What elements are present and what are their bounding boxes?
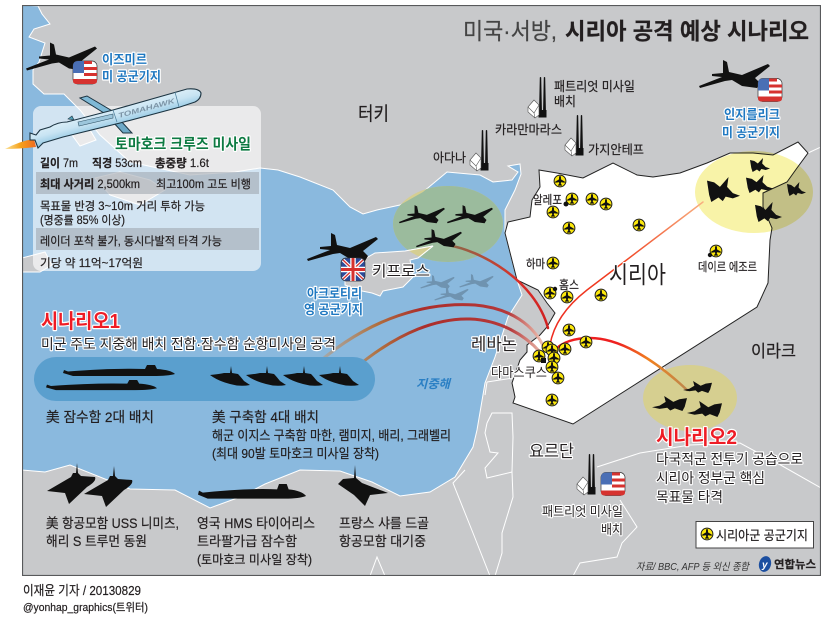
submarines: [46, 365, 175, 390]
icon: tomahawk missile: [5, 89, 201, 149]
carrier captions: 영국 HMS 타이어리스: [197, 516, 315, 531]
carrier captions: 항공모함 대기중: [339, 534, 426, 549]
deployment captions: [46, 409, 451, 461]
scenario 2 text: 다국적군 전투기 공습으로: [656, 451, 803, 467]
panel heading: 토마호크 크루즈 미사일: [115, 136, 251, 153]
ghost aircraft: [420, 274, 494, 301]
fighters scenario 2: [652, 381, 722, 417]
airbases: [533, 175, 722, 406]
spec rows: 총중량 1.6t: [155, 157, 210, 170]
patriot missiles: [470, 77, 625, 496]
source: 자료/ BBC, AFP 등 외신 종합: [636, 561, 751, 573]
Incirlik base: [699, 60, 782, 140]
place labels: 패트리엇 미사일: [554, 79, 635, 94]
legend: [696, 522, 814, 548]
place labels: [358, 79, 796, 537]
Izmir base: [26, 42, 161, 84]
scenario 2 text: 시나리오2: [656, 426, 737, 449]
place labels: 이라크: [751, 342, 796, 361]
Akrotiri base: 영 공군기지: [304, 302, 363, 317]
place labels: 배치: [601, 522, 623, 537]
Syria: [505, 142, 808, 424]
fighters from the north east: [707, 158, 806, 222]
place labels: 아다나: [433, 151, 466, 165]
carrier captions: 해리 S 트루먼 동원: [46, 534, 147, 549]
Incirlik base: 인지를리크: [724, 107, 780, 122]
aircraft over Cilicia: [399, 205, 493, 247]
Akrotiri base: [304, 233, 430, 317]
spec rows: (명중률 85% 이상): [40, 214, 125, 227]
spec rows: 길이 7m: [40, 157, 78, 170]
spec rows: 최고100m 고도 비행: [156, 178, 251, 191]
islands: [22, 130, 165, 272]
logo: Yonhap News: 연합뉴스: [774, 557, 816, 571]
icon: tomahawk missile: TOMAHAWK: [118, 98, 177, 120]
spec rows: [40, 157, 251, 270]
spec rows: 최대 사거리 2,500km: [40, 177, 140, 191]
deployment pill with ships: [34, 357, 375, 401]
place labels: 지중해: [416, 377, 452, 391]
legend: 시리아군 공군기지: [716, 528, 808, 543]
place labels: 요르단: [529, 442, 574, 461]
place labels: 알레포: [533, 193, 562, 207]
scenario 1 heading: 미군 주도 지중해 배치 전함·잠수함 순항미사일 공격: [41, 336, 336, 352]
place labels: 데이르 에조르: [698, 260, 757, 274]
carrier captions: (토마호크 미사일 장착): [197, 553, 312, 567]
scenario 2 text: [656, 426, 803, 505]
carriers and UK submarine: [47, 463, 388, 507]
carrier captions: 프랑스 샤를 드골: [339, 516, 429, 531]
place labels: 하마: [526, 257, 545, 271]
title: 미국·서방,: [463, 18, 557, 44]
spec rows: 레이더 포착 불가, 동시다발적 타격 가능: [40, 234, 222, 248]
deployment captions: 美 잠수함 2대 배치: [46, 409, 154, 425]
Izmir base: 미 공군기지: [102, 69, 161, 84]
title: 시리아 공격 예상 시나리오: [565, 18, 809, 44]
carrier captions: [46, 516, 429, 567]
Akrotiri base: 아크로티리: [307, 286, 362, 301]
destroyers: [210, 366, 359, 386]
place labels: 홈스: [559, 278, 579, 292]
deployment captions: 美 구축함 4대 배치: [212, 409, 319, 425]
carrier captions: 美 항공모함 USS 니미츠,: [46, 516, 179, 531]
Akrotiri base: 키프로스: [372, 263, 430, 280]
spec rows: 직경 53cm: [92, 157, 142, 170]
tomahawk info panel: [33, 106, 261, 271]
logo: Yonhap News: y: [761, 560, 768, 571]
place labels: 패트리엇 미사일: [542, 504, 623, 519]
byline: @yonhap_graphics(트위터): [23, 601, 148, 614]
scenario 1 heading: 시나리오1: [41, 310, 120, 333]
scenario 2 text: 목표물 타격: [656, 489, 723, 505]
place labels: 터키: [358, 103, 389, 125]
Izmir base: 이즈미르: [102, 52, 147, 67]
place labels: 레바논: [471, 335, 517, 354]
city dots: [541, 202, 712, 363]
place labels: 카라만마라스: [495, 123, 562, 137]
byline: 이재윤 기자 / 20130829: [23, 583, 141, 598]
land border lines: [370, 147, 821, 576]
sea: Mediterranean: [22, 5, 522, 508]
carrier captions: 트라팔가급 잠수함: [197, 534, 297, 549]
title: [463, 18, 809, 44]
place labels: 가지안테프: [588, 143, 644, 157]
Incirlik base: 미 공군기지: [722, 125, 780, 140]
strike arcs: [310, 202, 703, 390]
place labels: 시리아: [609, 262, 666, 289]
byline: [23, 583, 148, 614]
place labels: 배치: [554, 94, 576, 109]
deployment captions: (최대 90발 토마호크 미사일 장착): [212, 446, 379, 461]
scenario 1 heading: [41, 310, 336, 352]
place labels: 다마스쿠스: [491, 365, 547, 380]
spec rows: 목표물 반경 3~10m 거리 투하 가능: [40, 199, 205, 213]
ellipses: [393, 151, 813, 431]
logo: Yonhap News: [757, 555, 816, 573]
scenario 2 text: 시리아 정부군 핵심: [656, 470, 765, 486]
spec rows: 기당 약 11억~17억원: [40, 256, 143, 270]
deployment captions: 해군 이지스 구축함 마한, 램미지, 배리, 그래벨리: [212, 428, 451, 443]
Cyprus: [345, 246, 433, 296]
